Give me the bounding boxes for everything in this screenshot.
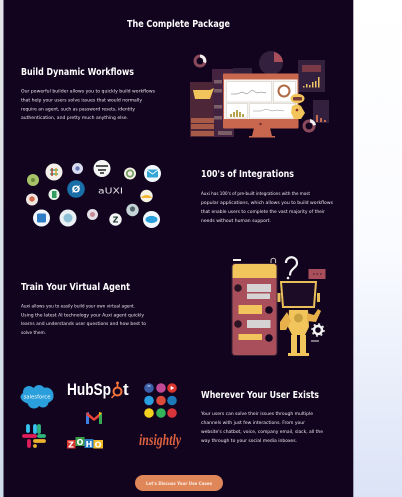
heading: integrations: 100's of Integrations xyxy=(201,169,294,180)
text block: integrations description: Auxi has 100's of pre-built integrations with the most xyxy=(201,191,310,197)
panel: train virtual agent text xyxy=(21,282,146,336)
logo: gmail xyxy=(86,412,102,424)
robot xyxy=(278,282,321,356)
logo: salesforce xyxy=(20,385,54,408)
speech bubble xyxy=(308,269,326,279)
chat avatars xyxy=(234,284,273,342)
icon: opsgenie: Ø xyxy=(72,184,81,196)
text block: agent description: Auxi allows you to easily build your own virtual agent. xyxy=(21,304,135,310)
text block: channels description xyxy=(200,411,323,444)
text block: channels description: website's chatbot, voice, company email, slack, all the xyxy=(201,429,323,435)
heading: build dynamic workflows: Build Dynamic Workflows xyxy=(21,67,134,78)
logo: insightly: insightly xyxy=(139,432,181,449)
icon: sheets xyxy=(48,189,60,200)
logos: channels xyxy=(20,380,181,450)
icon: zendesk: Z xyxy=(113,216,119,224)
icon: ring app xyxy=(124,168,136,180)
chart card top right xyxy=(298,60,325,92)
icon: hex app xyxy=(60,210,76,226)
icon: folder xyxy=(193,88,214,99)
text block: channels description: channels with just few interactions. From your xyxy=(201,420,305,426)
text block: workflows description: authentication, and pretty much anything else. xyxy=(21,115,128,121)
icon: app e xyxy=(72,163,83,174)
icon: pie chart xyxy=(259,51,283,75)
illustration: integrations icon cloud xyxy=(26,160,161,228)
chart card lower right xyxy=(313,100,329,123)
text block: workflows description: require an agent, such as password resets, identity xyxy=(21,106,135,112)
chat bubbles xyxy=(238,284,271,340)
text block: agent description xyxy=(21,304,146,336)
icon: flag app xyxy=(87,209,98,220)
icon: orange app xyxy=(26,194,38,206)
text block: workflows description xyxy=(21,88,156,121)
icon: app 1 xyxy=(27,174,39,186)
heading: wherever your user exists: Wherever Your User Exists xyxy=(201,390,319,401)
icon: slack xyxy=(46,164,62,180)
icon: auxi logo: aUXI xyxy=(98,186,123,196)
text block: integrations description: that enable users to complete the vast majority of their xyxy=(201,209,325,215)
logo: slack xyxy=(24,426,44,446)
icon: intercom xyxy=(33,210,50,226)
icon: buffer xyxy=(94,160,110,177)
text block: workflows description: Our powerful builder allows you to quickly build workflows xyxy=(21,88,156,94)
icon: small donut bottom xyxy=(304,119,316,131)
illustration: phone and robot xyxy=(232,257,326,356)
text block: agent description: Using the latest AI technology your Auxi agent quickly xyxy=(21,312,144,318)
icon: salesforce xyxy=(143,211,160,228)
button: discuss use cases xyxy=(135,475,223,491)
panel: wherever your user exists text xyxy=(200,390,323,444)
icon: small donut top left xyxy=(195,54,206,66)
logo: zoho: O xyxy=(95,440,102,450)
phone top marks xyxy=(233,258,276,263)
text block: integrations description: needs without human support. xyxy=(201,218,271,224)
text block: agent description: solve them. xyxy=(21,330,46,336)
icon: question mark xyxy=(286,257,297,279)
title: The Complete Package xyxy=(127,19,230,30)
icon: mail xyxy=(144,165,161,182)
document panels behind monitor xyxy=(190,68,252,137)
button: discuss use cases: Let's Discuss Your Use Cases xyxy=(146,481,212,487)
illustration: dashboard monitor xyxy=(190,51,329,138)
text block: integrations description: popular applications, which allows you to build workflows xyxy=(201,200,334,206)
icon: sun app xyxy=(140,190,153,202)
icon: person app xyxy=(126,204,139,216)
logo: zoho: H xyxy=(86,440,92,449)
logo: salesforce: salesforce xyxy=(24,394,51,400)
logo: hubspot: t xyxy=(123,380,129,399)
panel: build dynamic workflows text xyxy=(21,67,156,121)
mini robot xyxy=(290,94,305,119)
icon: gear xyxy=(311,324,324,341)
text block: agent description: learns and understands user questions and how best to xyxy=(21,321,146,327)
monitor xyxy=(223,74,298,138)
text block: channels description: way through to your social media inboxes. xyxy=(201,438,297,444)
logo: zoho: O xyxy=(77,438,84,447)
text block: integrations description xyxy=(201,191,334,224)
panel: integrations text xyxy=(201,169,334,224)
monitor screen xyxy=(224,80,298,119)
logo: hubspot: HubSp xyxy=(67,380,111,399)
text block: workflows description: that help your users solve issues that would normally xyxy=(21,98,142,104)
text block: channels description: Your users can solve their issues through multiple xyxy=(200,411,313,417)
logo: zoho: Z xyxy=(68,440,74,450)
heading: train your virtual agent: Train Your Virtual Agent xyxy=(21,282,130,293)
logo: zoho xyxy=(67,437,103,450)
phone xyxy=(232,264,277,356)
logo: social media grid xyxy=(144,383,177,418)
